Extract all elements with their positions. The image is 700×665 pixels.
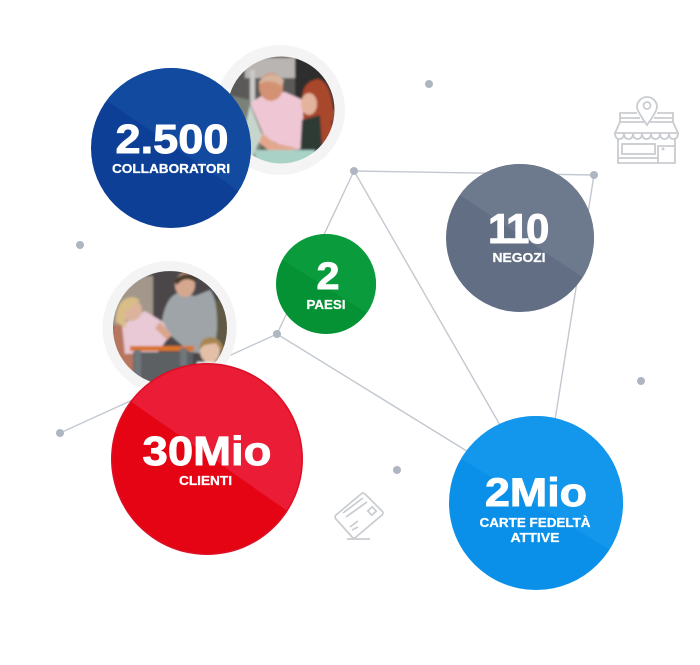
circle: 30Mio clienti: 30Mio: [142, 428, 272, 474]
circle: 2.500 collaboratori: [91, 68, 251, 228]
circle: 110 negozi: NEGOZI: [492, 250, 546, 265]
icon: loyalty card: [335, 493, 383, 539]
photo: family with shopping cart: [102, 261, 236, 395]
network dots: [56, 80, 645, 474]
circle: 2.500 collaboratori: COLLABORATORI: [112, 162, 230, 176]
circle: 2 paesi: 2: [316, 256, 340, 298]
network lines: [60, 171, 594, 453]
photo: colleagues at a desk: [215, 45, 345, 175]
circle: 110 negozi: [446, 164, 594, 312]
circle: 30Mio clienti: [111, 363, 303, 555]
circle: 2 paesi: PAESI: [306, 297, 346, 312]
circle: 2Mio carte fedelta attive: [449, 416, 623, 590]
circle: 110 negozi: 110: [488, 205, 549, 252]
icon: shop with location pin: [615, 97, 678, 163]
circle: 2Mio carte fedelta attive: 2Mio: [485, 471, 587, 515]
circle: 2.500 collaboratori: 2.500: [116, 116, 228, 162]
circle: 30Mio clienti: CLIENTI: [179, 474, 232, 488]
circle: 2Mio carte fedelta attive: CARTE FEDELTÀ: [480, 515, 591, 530]
circle: 2 paesi: [276, 234, 376, 334]
circle: 2Mio carte fedelta attive: ATTIVE: [510, 530, 560, 545]
